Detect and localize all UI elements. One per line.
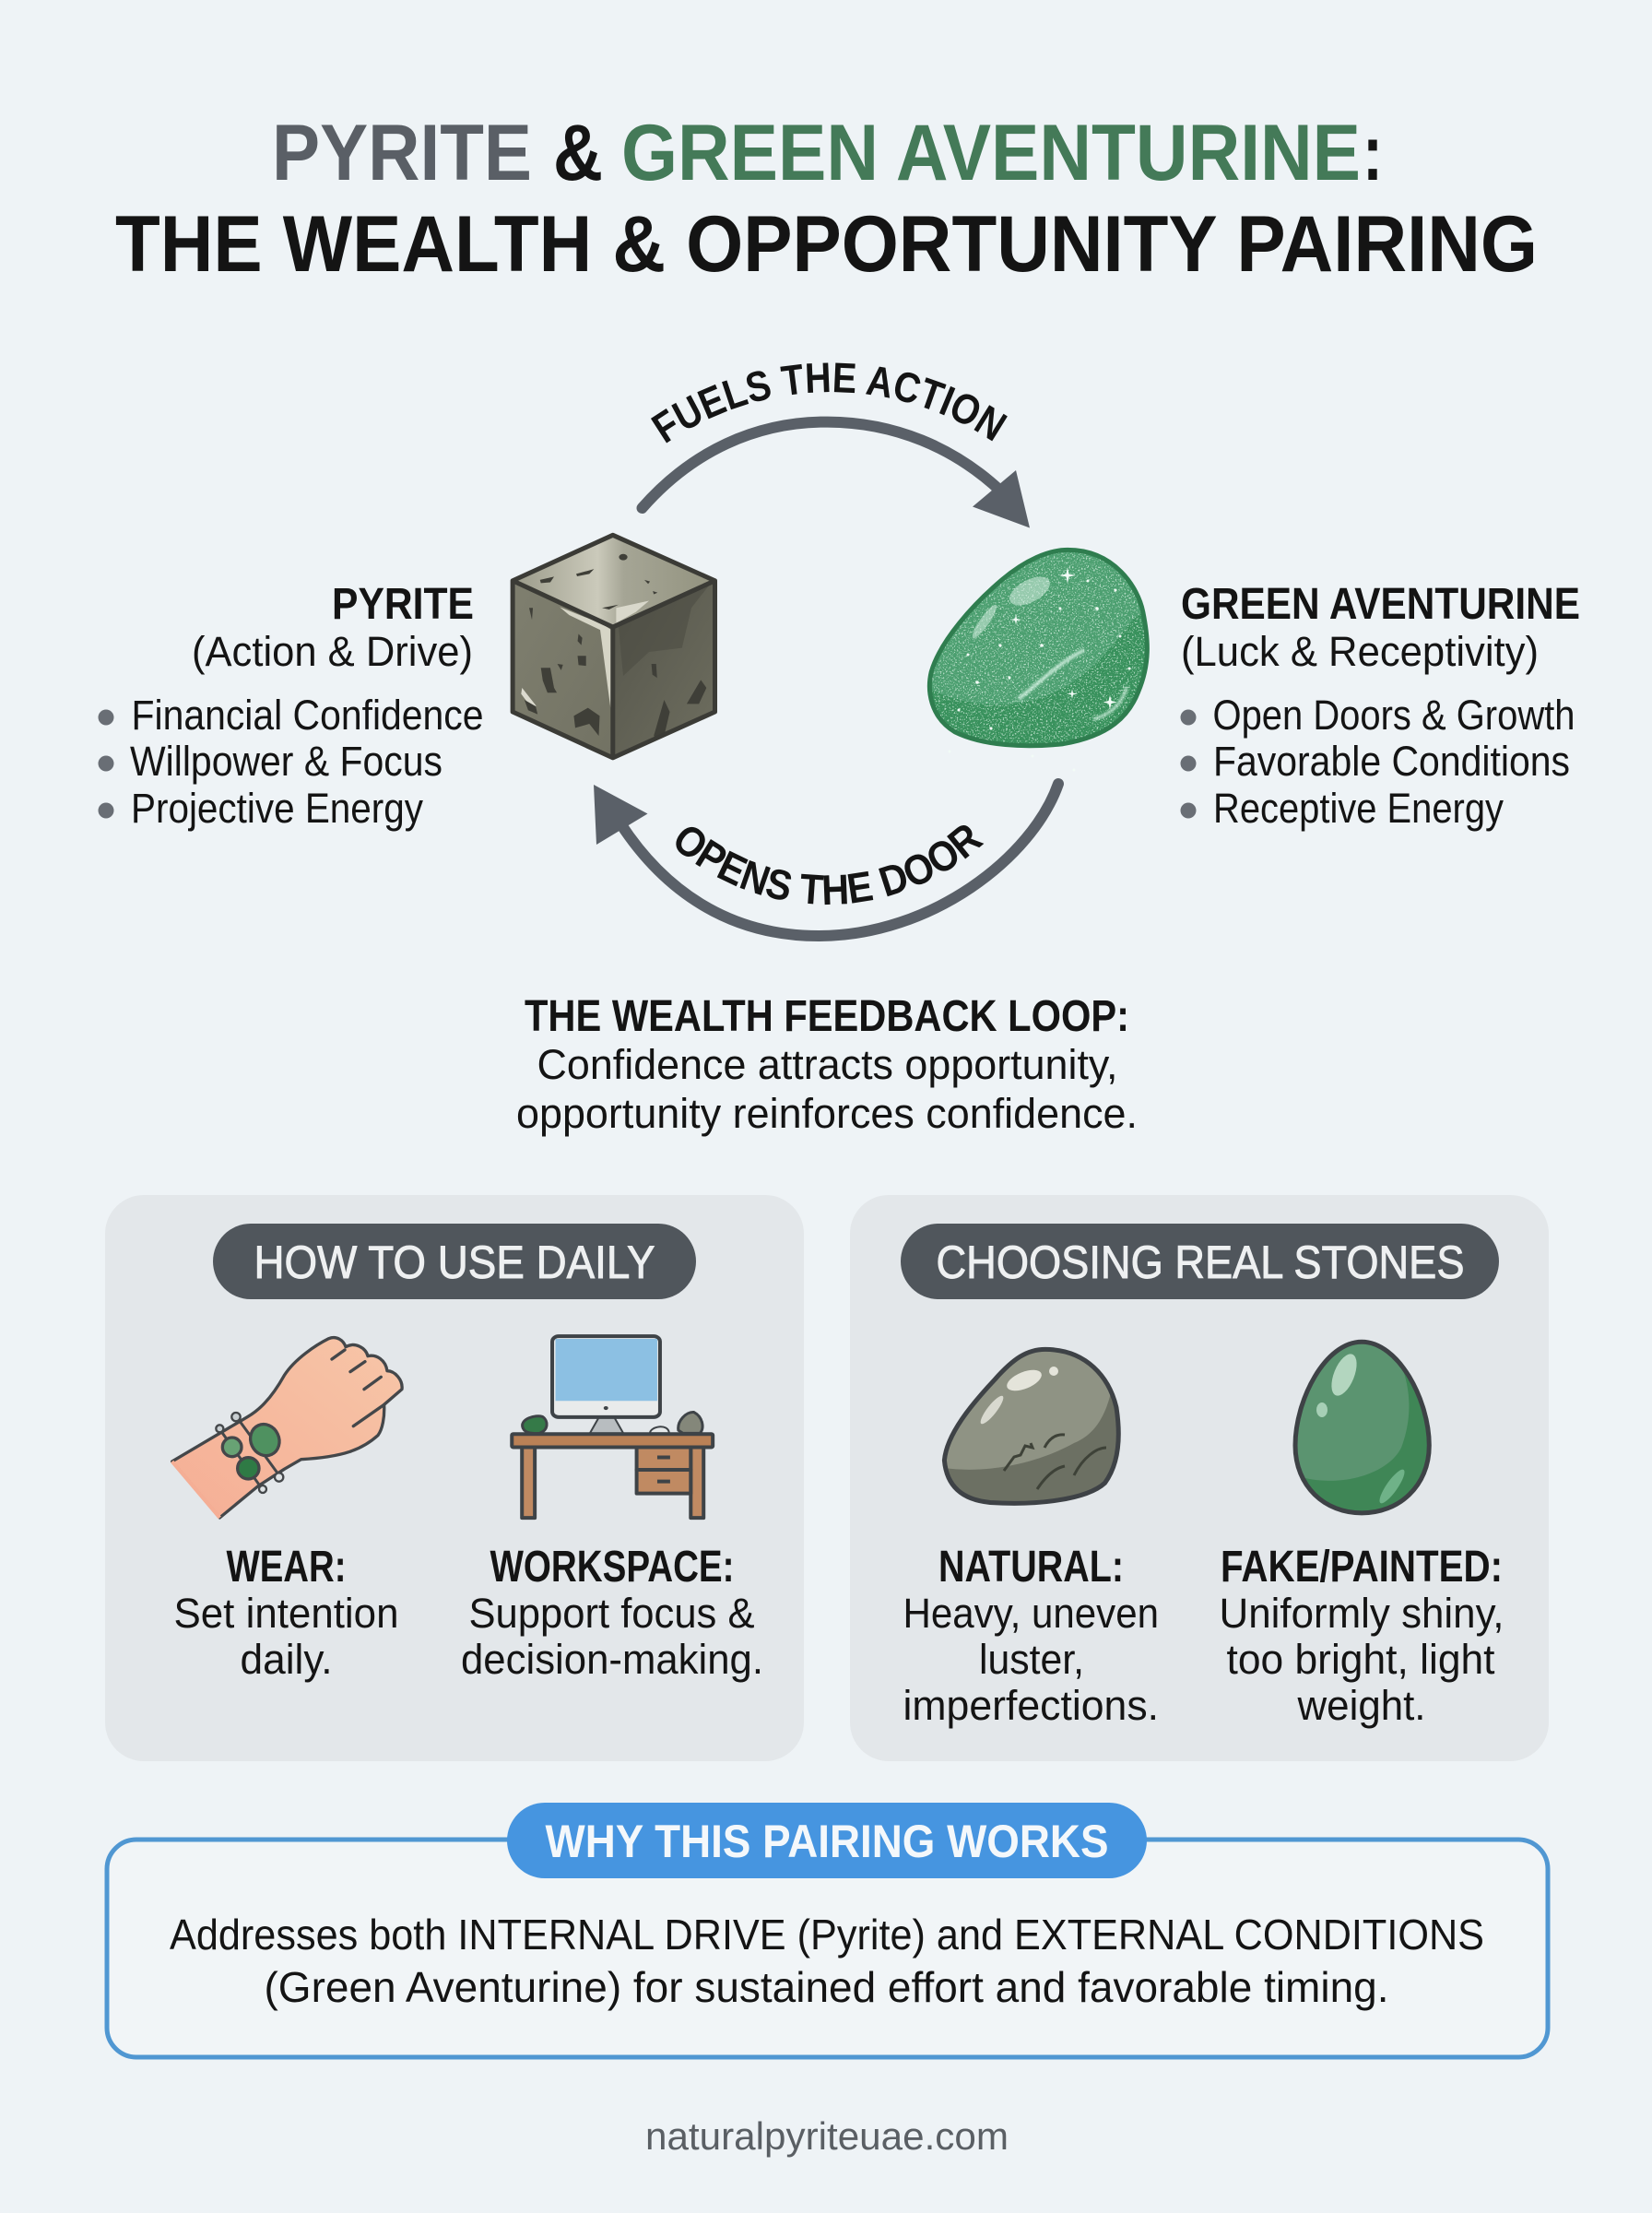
- arrow label: opens the door: OPENS THE DOOR: [676, 825, 985, 905]
- arrow label: fuels the action: FUELS THE ACTION: [651, 363, 1008, 443]
- text block: pyrite: (Action & Drive): [192, 628, 473, 675]
- text block: green aventurine: [1180, 580, 1580, 832]
- label: workspace: WORKSPACE:: [490, 1543, 734, 1592]
- icon: desk with computer: [512, 1336, 713, 1518]
- heading pill: WHY THIS PAIRING WORKS: [546, 1816, 1108, 1867]
- icon: natural stone: [942, 1346, 1121, 1506]
- feedback loop text: [516, 992, 1138, 1137]
- title: THE WEALTH & OPPORTUNITY PAIRING: [115, 200, 1538, 289]
- label: fake painted: FAKE/PAINTED:: [1221, 1543, 1503, 1592]
- panel heading pill: HOW TO USE DAILY: [254, 1237, 655, 1288]
- panel heading pill: CHOOSING REAL STONES: [937, 1237, 1464, 1288]
- title: [115, 109, 1538, 289]
- explanation text: Addresses both INTERNAL DRIVE (Pyrite) and EXTERNAL CONDITIONS: [170, 1911, 1484, 1959]
- label: fake painted: [1219, 1543, 1504, 1729]
- text block: green aventurine: GREEN AVENTURINE: [1181, 580, 1580, 629]
- title: :: [1363, 109, 1383, 197]
- heading pill: [507, 1803, 1147, 1878]
- label: workspace: Support focus &: [468, 1590, 754, 1637]
- explanation text: (Green Aventurine) for sustained effort and favorable timing.: [264, 1963, 1388, 2011]
- icon: wrist with bracelet: [172, 1338, 402, 1518]
- label: workspace: decision-making.: [461, 1636, 763, 1683]
- cube right-face shadow patch: [619, 584, 710, 676]
- label: wear: daily.: [240, 1636, 332, 1683]
- text block: pyrite: [98, 580, 483, 832]
- text block: green aventurine: Open Doors & Growth: [1213, 692, 1575, 739]
- panel: choosing real stones: [850, 1195, 1549, 1761]
- text block: green aventurine: Favorable Conditions: [1213, 738, 1570, 785]
- title: PYRITE: [272, 109, 532, 197]
- label: fake painted: weight.: [1297, 1682, 1425, 1729]
- label: natural: Heavy, uneven: [903, 1590, 1159, 1637]
- text block: pyrite: Projective Energy: [131, 785, 423, 832]
- text block: green aventurine: (Luck & Receptivity): [1181, 628, 1539, 675]
- panel heading pill: [901, 1224, 1499, 1299]
- arrow: aventurine to pyrite: [594, 784, 1058, 936]
- label: wear: Set intention: [173, 1590, 398, 1637]
- label: wear: WEAR:: [227, 1543, 347, 1592]
- text block: green aventurine: Receptive Energy: [1213, 785, 1504, 832]
- label: workspace: [461, 1543, 763, 1683]
- text block: pyrite: Financial Confidence: [131, 692, 483, 739]
- title: GREEN AVENTURINE: [621, 109, 1361, 197]
- icon: green aventurine stone: [927, 548, 1150, 749]
- feedback loop text: opportunity reinforces confidence.: [516, 1090, 1138, 1137]
- arrow: pyrite to aventurine: [642, 422, 1030, 527]
- panel heading pill: [213, 1224, 696, 1299]
- panel: why this pairing works: [107, 1803, 1548, 2057]
- feedback loop text: THE WEALTH FEEDBACK LOOP:: [525, 992, 1129, 1041]
- icon: pyrite cube: [513, 535, 715, 758]
- icon: fake painted stone: [1291, 1337, 1429, 1513]
- label: fake painted: too bright, light: [1226, 1636, 1495, 1683]
- label: natural: luster,: [979, 1636, 1084, 1683]
- footer website: naturalpyriteuae.com: [645, 2114, 1009, 2158]
- label: natural: imperfections.: [903, 1682, 1159, 1729]
- panel: how to use daily: [105, 1195, 804, 1761]
- text block: pyrite: PYRITE: [332, 580, 474, 629]
- feedback loop text: Confidence attracts opportunity,: [537, 1041, 1117, 1088]
- text block: pyrite: Willpower & Focus: [130, 738, 442, 785]
- label: wear: [173, 1543, 398, 1683]
- label: fake painted: Uniformly shiny,: [1219, 1590, 1504, 1637]
- explanation text: [170, 1911, 1484, 2011]
- label: natural: NATURAL:: [938, 1543, 1124, 1592]
- label: natural: [903, 1543, 1159, 1729]
- title: &: [553, 109, 603, 197]
